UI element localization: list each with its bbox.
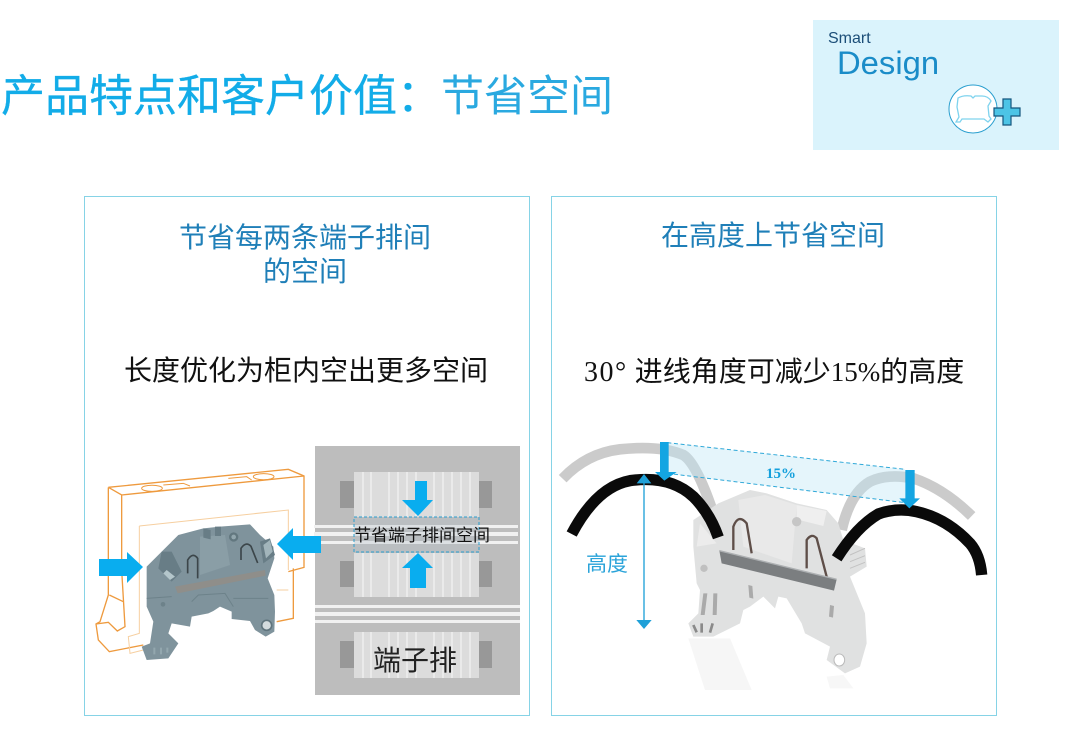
diagram: terminal block rows (314, 446, 520, 695)
arrow: height dimension (642, 480, 646, 625)
badge: Smart Design (813, 20, 1059, 150)
outline: old terminal (96, 469, 304, 653)
diagram: right terminal and wires (563, 442, 982, 690)
label: terminal row: 端子排 (373, 645, 457, 676)
arrow: right height drop (899, 470, 920, 508)
arrow: down (402, 481, 433, 516)
reflection (688, 638, 853, 690)
arrow: left height drop (655, 442, 677, 481)
panel text: 长度优化为柜内空出更多空间 (124, 355, 488, 386)
arrow: up (402, 553, 433, 588)
panel: height (551, 196, 997, 716)
label: height: 高度 (586, 553, 628, 576)
panel heading: 的空间 (263, 256, 347, 287)
icon: terminal with plus (948, 84, 1021, 134)
diagram: left terminal with outline (96, 469, 304, 660)
panel heading: 节省每两条端子排间 (179, 222, 431, 253)
label: 15%: 15% (766, 466, 796, 482)
badge text: Smart: Smart (828, 30, 871, 47)
wire: black new position (572, 479, 982, 575)
terminal body (688, 490, 867, 673)
panel: between rows (84, 196, 530, 716)
panel heading (179, 222, 431, 287)
arrow: left (277, 528, 321, 560)
title: 产品特点和客户价值：节省空间 (1, 72, 613, 121)
wire: gray old position (563, 448, 972, 530)
shaded zone: 15% (667, 443, 905, 503)
panel text: 30° 进线角度可减少15%的高度 (584, 357, 964, 388)
panel heading: 在高度上节省空间 (661, 220, 885, 251)
arrow: right (99, 552, 143, 583)
label: row gap: 节省端子排间空间 (354, 526, 490, 545)
badge text: Design: Design (837, 44, 939, 81)
terminal body (142, 524, 275, 660)
